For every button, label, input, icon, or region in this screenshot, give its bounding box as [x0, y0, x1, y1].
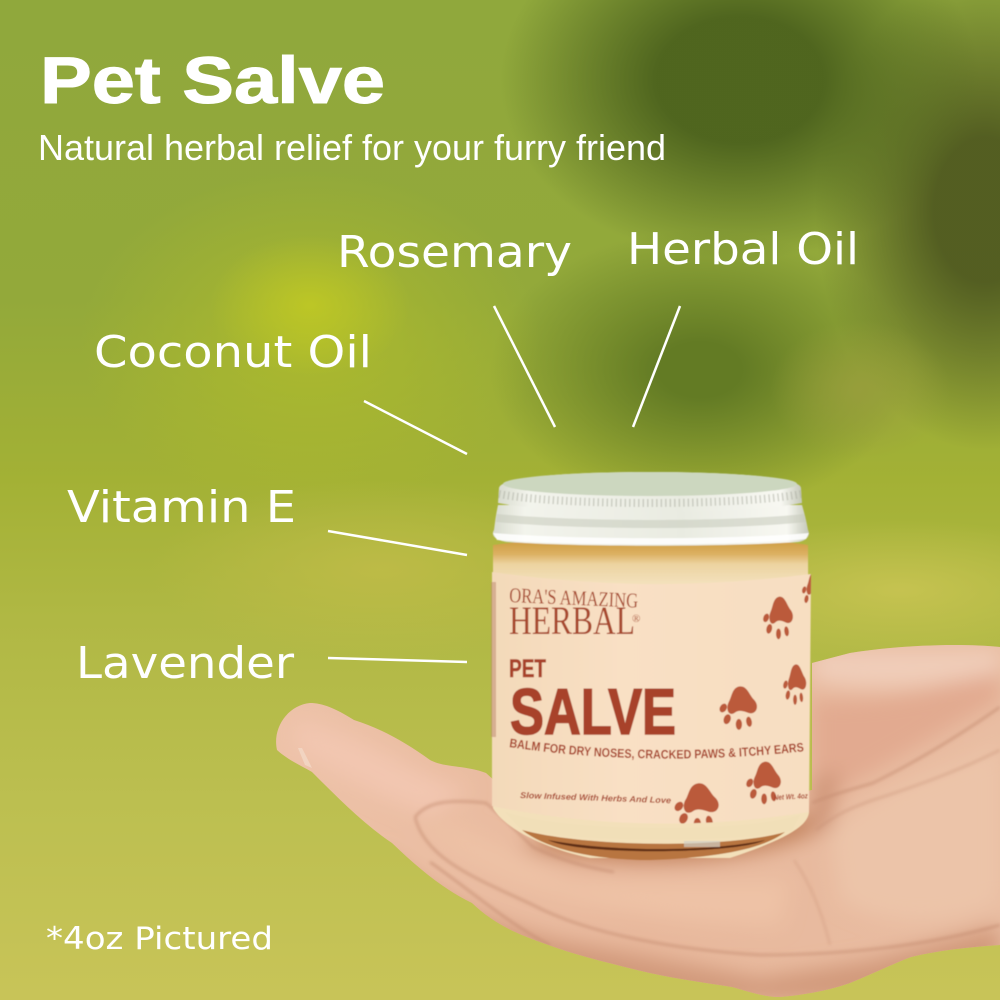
callout: Herbal Oil: Herbal Oil — [627, 224, 859, 275]
brand: ORA'S AMAZING — [509, 583, 639, 613]
footnote: *4oz Pictured — [46, 921, 273, 957]
jar — [490, 471, 812, 860]
tagline: Slow Infused With Herbs And Love — [520, 790, 671, 805]
hand shading — [295, 650, 1000, 1000]
callout: Herbal Oil — [627, 224, 859, 427]
callout: Coconut Oil: Coconut Oil — [94, 327, 372, 378]
callout: Lavender — [76, 638, 467, 689]
callout: Coconut Oil — [94, 327, 467, 454]
jar label: SALVE — [510, 675, 676, 748]
side text strip — [491, 582, 496, 737]
jar label: ® — [632, 613, 640, 625]
hand holding the jar — [276, 645, 1000, 1000]
jar label: BALM FOR DRY NOSES, CRACKED PAWS & ITCHY EARS — [509, 738, 804, 760]
callout: Rosemary: Rosemary — [337, 227, 572, 278]
jar label — [490, 572, 812, 824]
jar label: HERBAL — [509, 598, 635, 643]
lid — [493, 472, 809, 546]
callout: Rosemary — [337, 227, 572, 427]
callout: Lavender: Lavender — [76, 638, 295, 689]
paw prints — [674, 574, 812, 824]
title: Pet Salve — [40, 43, 385, 117]
subtitle: Natural herbal relief for your furry friend — [38, 127, 666, 168]
callout: Vitamin E: Vitamin E — [67, 482, 296, 533]
callout: Vitamin E — [67, 482, 467, 555]
finger and palm creases — [415, 707, 1000, 955]
product name: PET — [509, 655, 546, 683]
jar base and salve — [493, 538, 809, 858]
net weight: Net Wt. 4oz — [774, 791, 808, 802]
fingernail highlight — [298, 748, 312, 768]
description — [509, 747, 806, 759]
